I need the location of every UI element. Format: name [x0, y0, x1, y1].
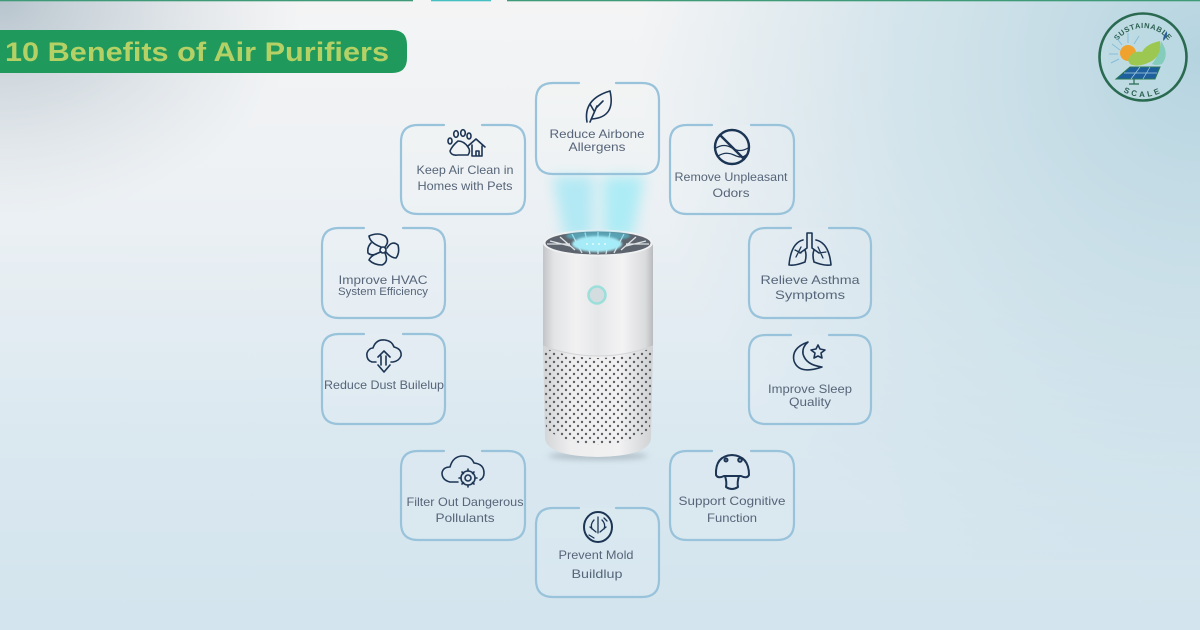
card: remove unpleasant odors	[670, 125, 794, 214]
label: Symptoms	[775, 288, 845, 302]
logo text: sustainable: SUSTAINABLE	[1114, 22, 1172, 40]
label: Prevent Mold	[558, 548, 634, 562]
card: prevent mold buildup	[536, 508, 659, 597]
label: Homes with Pets	[418, 179, 512, 193]
label	[338, 273, 429, 298]
icon: no odor sign	[715, 130, 749, 164]
label: Pollulants	[436, 511, 494, 525]
logo text: scale: SCALE	[1124, 88, 1160, 97]
label	[550, 127, 645, 154]
label: Relieve Asthma	[760, 273, 860, 287]
card: improve hvac system efficiency	[322, 228, 445, 318]
card: relieve asthma symptoms	[749, 228, 871, 318]
logo art: solar panel	[1116, 67, 1160, 84]
label: Reduce Airbone	[550, 127, 645, 141]
card: support cognitive function	[670, 451, 794, 540]
air purifier	[540, 176, 656, 460]
mesh section	[540, 340, 656, 457]
logo art: sun	[1109, 33, 1139, 63]
logo: Sustainable Scale	[1098, 12, 1188, 102]
label: Filter Out Dangerous	[406, 495, 524, 509]
air beams	[552, 176, 645, 238]
label: Remove Unpleasant	[674, 170, 788, 184]
label	[416, 163, 514, 193]
icon: mushroom	[716, 455, 749, 489]
card: reduce airborne allergens	[536, 83, 659, 174]
card: keep air clean in homes with pets	[401, 125, 525, 214]
label	[406, 495, 524, 525]
card: improve sleep quality	[749, 335, 871, 424]
title: 10 Benefits of Air Purifiers	[5, 37, 389, 67]
label: Buildlup	[572, 567, 623, 581]
label: Support Cognitive	[678, 494, 786, 508]
label: Keep Air Clean in	[416, 163, 514, 177]
icon: mold	[584, 512, 612, 542]
label	[678, 494, 786, 525]
icon: cloud with arrows	[367, 340, 401, 372]
label: System Efficiency	[338, 286, 429, 298]
icon: paw and house	[448, 130, 485, 156]
icon: cloud with gear	[442, 456, 484, 487]
label: Function	[707, 511, 757, 525]
icon: lungs	[789, 233, 831, 265]
label: Quality	[789, 395, 831, 409]
upper body	[543, 243, 653, 362]
label: Improve Sleep	[768, 382, 852, 396]
card: reduce dust buildup	[322, 334, 445, 424]
icon: leaf	[586, 91, 611, 122]
label	[674, 170, 788, 200]
label: Reduce Dust Builelup	[324, 378, 444, 392]
top edge stripes	[0, 0, 1200, 1]
status ring	[588, 286, 606, 304]
label	[760, 273, 860, 302]
label: Odors	[712, 186, 750, 200]
label	[768, 382, 852, 409]
title banner	[0, 30, 407, 73]
label	[558, 548, 634, 581]
card: filter out dangerous pollutants	[401, 451, 525, 540]
icon: moon and star	[794, 342, 825, 370]
label: Allergens	[568, 140, 626, 154]
label: Improve HVAC	[338, 273, 428, 287]
logo art: leaves	[1128, 31, 1167, 66]
shadow	[548, 452, 648, 460]
icon: fan	[368, 234, 399, 265]
top intake	[543, 230, 653, 256]
